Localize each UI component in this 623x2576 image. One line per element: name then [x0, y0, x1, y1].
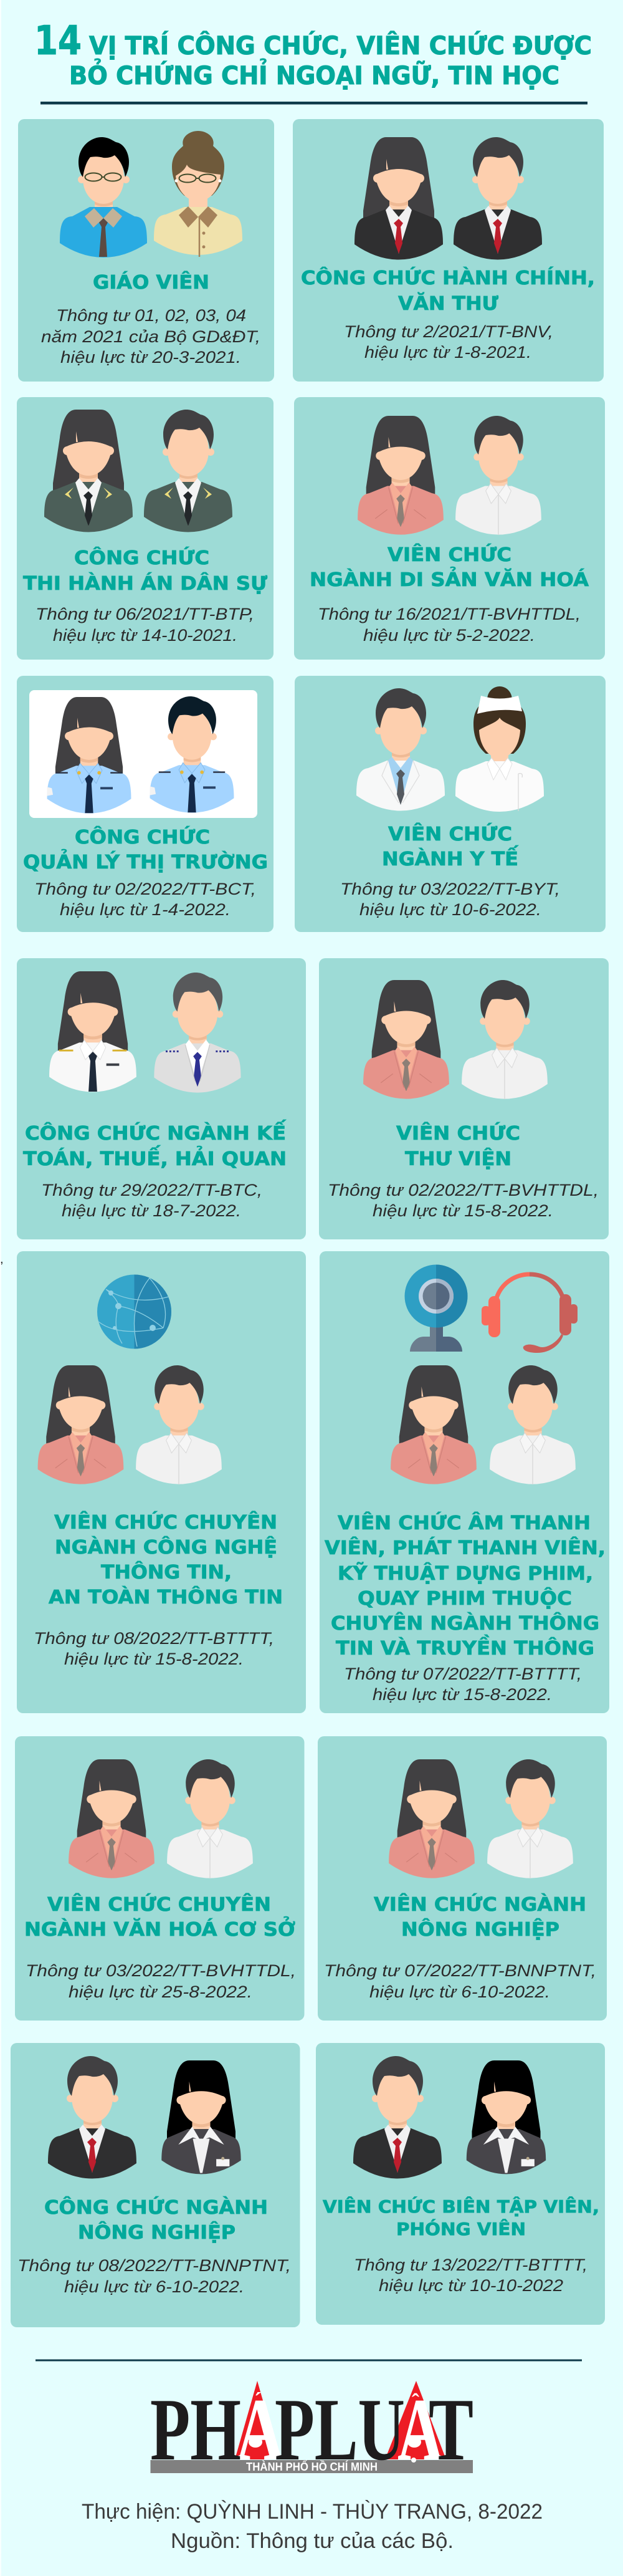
panel: viên chức ngành nông nghiệp — [318, 1736, 607, 2021]
person: woman in grey jacket — [467, 2060, 546, 2174]
heading: NÔNG NGHIỆP — [401, 1918, 559, 1941]
logo: Pháp Luật: PH — [150, 2380, 241, 2479]
legal reference — [318, 605, 581, 645]
person: man in suit — [454, 137, 542, 259]
logo: Pháp Luật: THÀNH PHỐ HỒ CHÍ MINH — [246, 2460, 378, 2473]
legal reference — [344, 1665, 582, 1704]
heading: VIÊN CHỨC — [388, 822, 512, 845]
legal reference — [41, 306, 260, 367]
heading: GIÁO VIÊN — [93, 271, 209, 294]
legal reference: Thông tư 2/2021/TT-BNV, — [344, 322, 553, 341]
legal reference: hiệu lực từ 1-4-2022. — [60, 900, 231, 919]
person: man in blue uniform — [150, 696, 234, 813]
heading: QUAY PHIM THUỘC — [358, 1587, 572, 1610]
legal reference — [354, 2256, 587, 2295]
title — [34, 18, 592, 90]
legal reference — [34, 1629, 274, 1668]
panel: công chức hành chính, văn thư — [293, 119, 604, 382]
heading: PHÓNG VIÊN — [396, 2218, 526, 2239]
icon: globe — [97, 1274, 171, 1349]
legal reference: năm 2021 của Bộ GD&ĐT, — [41, 327, 260, 346]
heading: KỸ THUẬT DỰNG PHIM, — [338, 1562, 593, 1585]
heading: VIÊN CHỨC CHUYÊN — [47, 1893, 271, 1916]
legal reference: Thông tư 07/2022/TT-BTTTT, — [344, 1665, 582, 1683]
person: man in grey uniform — [154, 973, 241, 1093]
person: man in suit — [353, 2056, 442, 2178]
panel: công chức thi hành án dân sự — [17, 397, 273, 660]
logo: Pháp Luật: ´ — [254, 2388, 262, 2413]
panel: công chức ngành kế toán, thuế, hải quan — [17, 958, 306, 1239]
heading: CÔNG CHỨC — [75, 825, 210, 848]
panel: giáo viên — [18, 119, 274, 382]
heading — [24, 1893, 295, 1941]
person: man in green uniform — [144, 410, 232, 532]
white image box — [29, 690, 257, 818]
heading: NÔNG NGHIỆP — [78, 2221, 235, 2244]
legal reference: hiệu lực từ 15-8-2022. — [64, 1650, 244, 1668]
logo: Pháp Luật: A — [397, 2380, 443, 2479]
legal reference: Thông tư 06/2021/TT-BTP, — [36, 605, 254, 623]
legal reference: hiệu lực từ 6-10-2022. — [64, 2277, 244, 2296]
person: woman in pink jacket — [389, 1759, 475, 1878]
heading: THI HÀNH ÁN DÂN SỰ — [23, 572, 267, 595]
legal reference: Thông tư 07/2022/TT-BNNPTNT, — [324, 1961, 596, 1980]
person: woman in pink jacket — [358, 416, 444, 535]
heading: CHUYÊN NGÀNH THÔNG — [331, 1612, 599, 1635]
legal reference — [34, 880, 256, 919]
heading — [49, 1511, 283, 1608]
person: woman in pink jacket — [69, 1759, 155, 1878]
heading: CÔNG CHỨC NGÀNH — [44, 2196, 268, 2219]
person: woman in pink jacket — [391, 1365, 477, 1484]
heading: NGÀNH Y TẾ — [382, 845, 519, 870]
legal reference: hiệu lực từ 15-8-2022. — [373, 1685, 552, 1704]
legal reference: Thông tư 08/2022/TT-BNNPTNT, — [17, 2256, 291, 2275]
heading — [382, 822, 519, 870]
legal reference — [344, 322, 553, 362]
legal reference: Thông tư 03/2022/TT-BYT, — [340, 880, 560, 898]
logo: Pháp Luật: ˆ — [412, 2389, 419, 2414]
person: man in white shirt — [136, 1365, 222, 1484]
heading — [323, 2196, 599, 2239]
credits: Thực hiện: QUỲNH LINH - THÙY TRANG, 8-2022 — [82, 2500, 543, 2524]
heading: THƯ VIỆN — [405, 1147, 511, 1170]
heading — [23, 546, 267, 595]
person: doctor — [356, 688, 445, 810]
panel: viên chức ngành y tế — [295, 676, 606, 932]
heading — [374, 1893, 586, 1941]
credits: Nguồn: Thông tư của các Bộ. — [171, 2529, 454, 2553]
heading: CÔNG CHỨC NGÀNH KẾ — [25, 1120, 287, 1145]
person: woman in green uniform — [44, 410, 133, 532]
heading: TOÁN, THUẾ, HẢI QUAN — [23, 1145, 287, 1170]
heading — [325, 1511, 606, 1660]
panel: công chức quản lý thị trường — [17, 676, 273, 932]
legal reference: hiệu lực từ 20-3-2021. — [60, 348, 241, 367]
heading: TIN VÀ TRUYỀN THÔNG — [336, 1635, 594, 1660]
heading: VIÊN CHỨC — [396, 1122, 520, 1145]
legal reference — [340, 880, 560, 919]
person: man in white shirt — [487, 1759, 573, 1878]
person: woman in pink jacket — [38, 1365, 123, 1484]
heading: CÔNG CHỨC HÀNH CHÍNH, — [301, 266, 595, 289]
legal reference: Thông tư 02/2022/TT-BVHTTDL, — [328, 1181, 599, 1199]
heading: VIÊN CHỨC BIÊN TẬP VIÊN, — [323, 2196, 599, 2217]
heading: VIÊN CHỨC CHUYÊN — [54, 1511, 277, 1534]
title: VỊ TRÍ CÔNG CHỨC, VIÊN CHỨC ĐƯỢC — [89, 31, 592, 60]
legal reference — [41, 1181, 262, 1220]
person: woman in white uniform — [49, 971, 136, 1092]
person: man in suit — [48, 2056, 136, 2178]
panel: viên chức văn hoá cơ sở — [15, 1736, 304, 2021]
heading — [44, 2196, 268, 2244]
heading — [301, 266, 595, 315]
person: man in white shirt — [455, 416, 541, 535]
logo: Pháp Luật: PLU — [275, 2380, 405, 2479]
heading: VIÊN CHỨC NGÀNH — [374, 1893, 586, 1916]
legal reference: hiệu lực từ 18-7-2022. — [62, 1201, 241, 1220]
legal reference: Thông tư 01, 02, 03, 04 — [56, 306, 246, 325]
legal reference: Thông tư 16/2021/TT-BVHTTDL, — [318, 605, 581, 623]
person: man in white shirt — [462, 980, 548, 1099]
heading — [23, 1120, 287, 1170]
legal reference: Thông tư 03/2022/TT-BVHTTDL, — [26, 1961, 296, 1980]
legal reference: Thông tư 02/2022/TT-BCT, — [34, 880, 256, 898]
legal reference — [17, 2256, 291, 2296]
panel: viên chức biên tập viên, phóng viên — [316, 2043, 605, 2325]
heading — [310, 543, 589, 591]
title: 14 — [34, 18, 82, 64]
panel: viên chức công nghệ thông tin — [17, 1251, 306, 1713]
stray comma at the left edge: , — [0, 1252, 4, 1266]
panel: viên chức thư viện — [319, 958, 609, 1239]
legal reference — [26, 1961, 296, 2001]
heading: VIÊN CHỨC ÂM THANH — [338, 1511, 591, 1534]
legal reference: hiệu lực từ 5-2-2022. — [363, 626, 535, 645]
person: woman in blue uniform — [47, 697, 131, 814]
heading: NGÀNH VĂN HOÁ CƠ SỞ — [24, 1916, 295, 1941]
person: woman in pink jacket — [363, 980, 449, 1099]
legal reference: hiệu lực từ 6-10-2022. — [369, 1982, 550, 2001]
legal reference: hiệu lực từ 10-6-2022. — [359, 900, 541, 919]
title: BỎ CHỨNG CHỈ NGOẠI NGỮ, TIN HỌC — [69, 57, 559, 90]
panel: viên chức âm thanh, phát thanh — [320, 1251, 609, 1713]
logo: Pháp Luật: T — [429, 2380, 473, 2479]
person: man in white shirt — [490, 1365, 576, 1484]
legal reference: Thông tư 29/2022/TT-BTC, — [41, 1181, 262, 1199]
logo: Pháp Luật — [150, 2380, 473, 2479]
heading: THÔNG TIN, — [101, 1560, 232, 1584]
heading: AN TOÀN THÔNG TIN — [49, 1585, 283, 1608]
logo: Pháp Luật: A — [236, 2380, 284, 2479]
legal reference: hiệu lực từ 25-8-2022. — [69, 1982, 252, 2001]
person: woman in grey jacket — [161, 2060, 241, 2174]
icon: webcam — [405, 1264, 467, 1352]
heading: VIÊN, PHÁT THANH VIÊN, — [325, 1537, 606, 1559]
legal reference — [324, 1961, 596, 2001]
legal reference: hiệu lực từ 10-10-2022 — [379, 2276, 563, 2295]
person: female teacher — [154, 131, 242, 257]
panel: công chức ngành nông nghiệp — [11, 2043, 300, 2327]
icon: headset — [482, 1274, 578, 1353]
heading — [396, 1122, 520, 1170]
person: male teacher — [60, 137, 147, 257]
legal reference: hiệu lực từ 14-10-2021. — [53, 626, 237, 645]
person: man in white shirt — [167, 1759, 253, 1878]
heading — [23, 825, 268, 873]
heading: NGÀNH DI SẢN VĂN HOÁ — [310, 567, 589, 591]
legal reference: hiệu lực từ 15-8-2022. — [373, 1201, 553, 1220]
legal reference: Thông tư 13/2022/TT-BTTTT, — [354, 2256, 587, 2274]
heading: VIÊN CHỨC — [388, 543, 511, 566]
heading: QUẢN LÝ THỊ TRƯỜNG — [23, 849, 268, 873]
legal reference — [328, 1181, 599, 1220]
legal reference: hiệu lực từ 1-8-2021. — [364, 343, 531, 362]
heading: VĂN THƯ — [398, 292, 498, 315]
person: woman in suit — [354, 137, 443, 259]
heading: CÔNG CHỨC — [74, 546, 209, 569]
legal reference: Thông tư 08/2022/TT-BTTTT, — [34, 1629, 274, 1648]
person: nurse — [455, 686, 544, 812]
legal reference — [36, 605, 254, 645]
panel: viên chức ngành di sản văn hoá — [294, 397, 605, 660]
heading: NGÀNH CÔNG NGHỆ — [55, 1536, 277, 1559]
credits — [82, 2500, 543, 2553]
